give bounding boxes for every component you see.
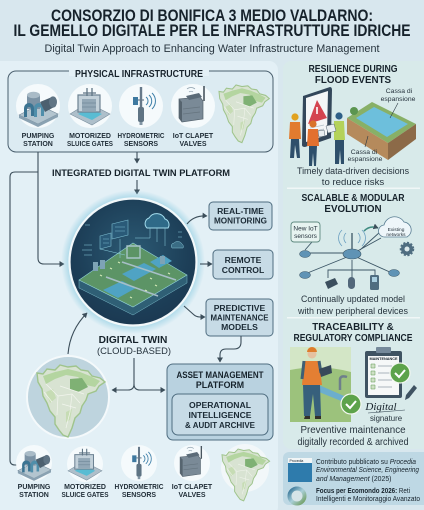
caption: scalable: Continually updated model bbox=[301, 294, 405, 305]
divider bbox=[287, 317, 420, 318]
caption: scalable: with new peripheral devices bbox=[297, 306, 408, 317]
map: territory in circle bbox=[27, 356, 109, 438]
caption: resilience: Timely data-driven decisions bbox=[297, 166, 409, 177]
section: scalable bbox=[291, 193, 413, 317]
text: publication bbox=[316, 459, 419, 483]
box: real-time monitoring bbox=[209, 202, 272, 230]
callout: basin labels: Cassa di bbox=[386, 88, 413, 95]
heading: traceability: TRACEABILITY & bbox=[312, 322, 394, 333]
panel: asset management platform: ASSET MANAGEMENT bbox=[176, 370, 264, 380]
box: remote control bbox=[213, 250, 273, 279]
callout: basin labels bbox=[348, 88, 416, 163]
labels: bottom row: SENSORS bbox=[122, 492, 156, 499]
box: predictive maintenance: MAINTENANCE bbox=[210, 312, 269, 322]
diagram: IoT network: Existing bbox=[388, 227, 405, 233]
map: bottom territory bbox=[221, 444, 270, 501]
callout: basin labels: Cassa di bbox=[351, 149, 378, 156]
labels: bottom row: STATION bbox=[19, 492, 49, 499]
icon: journal cover: Procedia bbox=[290, 459, 303, 463]
divider bbox=[287, 188, 420, 189]
panel: asset management platform: PLATFORM bbox=[196, 380, 244, 390]
title bbox=[14, 7, 410, 40]
icon: maintenance clipboard: MAINTENANCE bbox=[369, 357, 398, 361]
icon: sluice gates bbox=[67, 446, 103, 482]
panel: publication note bbox=[283, 452, 424, 505]
diagram: IoT network: networks bbox=[386, 232, 406, 238]
label: digital signature: Digital bbox=[364, 401, 397, 413]
caption: traceability bbox=[298, 425, 408, 448]
labels: bottom row bbox=[18, 484, 213, 499]
diagram: IoT network: New IoT bbox=[293, 226, 318, 232]
digital twin globe bbox=[61, 190, 205, 334]
icon: pumping station bbox=[16, 445, 52, 481]
icon row: bottom infrastructure bbox=[16, 444, 270, 501]
diagram: IoT network: sensors bbox=[294, 233, 318, 240]
heading: resilience bbox=[308, 64, 398, 86]
icon: sensor bbox=[121, 445, 157, 481]
illustration: field inspector bbox=[290, 347, 361, 422]
labels: infrastructure: MOTORIZED bbox=[69, 133, 111, 140]
labels: bottom row: VALVES bbox=[179, 492, 206, 499]
icon: pumping station bbox=[16, 84, 60, 128]
labels: bottom row: IoT CLAPET bbox=[172, 484, 213, 491]
labels: bottom row: PUMPING bbox=[18, 484, 51, 491]
caption: traceability: digitally recorded & archived bbox=[298, 437, 408, 448]
box: real-time monitoring: REAL-TIME bbox=[217, 206, 264, 216]
panel: benefits column bbox=[283, 61, 424, 449]
label: digital twin bbox=[97, 335, 171, 356]
heading: resilience: FLOOD EVENTS bbox=[315, 75, 392, 86]
subtitle: Digital Twin Approach to Enhancing Water Infrastructure Management bbox=[44, 43, 380, 55]
label: digital twin: (CLOUD-BASED) bbox=[97, 345, 171, 356]
callout: basin labels: espansione bbox=[381, 96, 416, 103]
labels: infrastructure bbox=[22, 133, 214, 148]
title: CONSORZIO DI BONIFICA 3 MEDIO VALDARNO: bbox=[51, 7, 373, 25]
box: operational intelligence: OPERATIONAL bbox=[189, 400, 251, 410]
heading: resilience: RESILIENCE DURING bbox=[308, 64, 398, 75]
labels: infrastructure: PUMPING bbox=[22, 133, 55, 140]
labels: infrastructure: SENSORS bbox=[124, 141, 158, 148]
box: operational intelligence: & AUDIT ARCHIVE bbox=[185, 420, 255, 430]
icon: hydrometric sensor bbox=[119, 84, 163, 128]
text: focus bbox=[316, 488, 420, 503]
labels: bottom row: SLUICE GATES bbox=[62, 492, 109, 499]
icon: expansion basin bbox=[347, 102, 416, 160]
box: operational intelligence: INTELLIGENCE bbox=[188, 410, 252, 420]
map: territory bbox=[219, 85, 269, 143]
labels: bottom row: HYDROMETRIC bbox=[114, 484, 164, 491]
caption: traceability: Preventive maintenance bbox=[300, 425, 406, 436]
text: focus: Intelligenti e Monitoraggio Avanzato bbox=[316, 496, 420, 503]
panel: physical infrastructure bbox=[8, 66, 273, 152]
labels: infrastructure: STATION bbox=[23, 141, 53, 148]
icon: sluice gates bbox=[68, 84, 112, 128]
label: digital signature bbox=[364, 401, 405, 423]
connector lines bbox=[10, 152, 137, 465]
text: focus: Focus per Ecomondo 2026: Reti bbox=[316, 488, 410, 495]
text: publication: Contributo pubblicato su Procedia bbox=[316, 459, 416, 466]
heading: scalable: EVOLUTION bbox=[324, 204, 382, 215]
label: digital twin: DIGITAL TWIN bbox=[99, 335, 167, 346]
panel: asset management platform bbox=[167, 364, 273, 440]
label: digital signature: signature bbox=[370, 414, 402, 423]
caption: scalable bbox=[297, 294, 408, 317]
box: predictive maintenance bbox=[206, 299, 273, 336]
callout: basin labels: espansione bbox=[348, 156, 383, 163]
labels: infrastructure: IoT CLAPET bbox=[173, 133, 214, 140]
heading: scalable bbox=[302, 193, 404, 215]
labels: infrastructure: HYDROMETRIC bbox=[118, 133, 164, 140]
box: operational intelligence bbox=[172, 394, 268, 435]
section: resilience bbox=[289, 64, 416, 188]
arrows: twin to services bbox=[68, 216, 241, 390]
labels: bottom row: MOTORIZED bbox=[64, 484, 106, 491]
caption: resilience bbox=[297, 166, 409, 188]
labels: infrastructure: SLUICE GATES bbox=[67, 141, 113, 148]
icon: engineers bbox=[289, 112, 345, 166]
icon: Ecomondo ring bbox=[290, 488, 304, 504]
text: publication: Environmental Science, Engineering bbox=[316, 467, 419, 474]
heading: scalable: SCALABLE & MODULAR bbox=[302, 193, 404, 204]
icon: tablet with warning bbox=[302, 87, 332, 147]
section: traceability bbox=[290, 322, 417, 448]
icon: IoT valves bbox=[174, 445, 210, 481]
box: predictive maintenance: MODELS bbox=[221, 322, 258, 332]
box: remote control: CONTROL bbox=[222, 265, 264, 275]
box: remote control: REMOTE bbox=[225, 255, 262, 265]
text: publication: and Management (2025) bbox=[316, 476, 391, 483]
heading: traceability bbox=[294, 322, 413, 344]
labels: infrastructure: VALVES bbox=[180, 141, 207, 148]
icon: IoT valves bbox=[171, 84, 215, 128]
panel: physical infrastructure: PHYSICAL INFRASTRUCTURE bbox=[75, 69, 203, 80]
heading: integrated platform: INTEGRATED DIGITAL TWIN PLATFORM bbox=[52, 168, 230, 179]
panel: main architecture bbox=[0, 61, 278, 510]
box: real-time monitoring: MONITORING bbox=[214, 216, 267, 226]
diagram: IoT network bbox=[291, 217, 413, 290]
caption: resilience: to reduce risks bbox=[322, 177, 384, 188]
icon: journal cover bbox=[288, 458, 312, 482]
box: predictive maintenance: PREDICTIVE bbox=[214, 303, 266, 313]
